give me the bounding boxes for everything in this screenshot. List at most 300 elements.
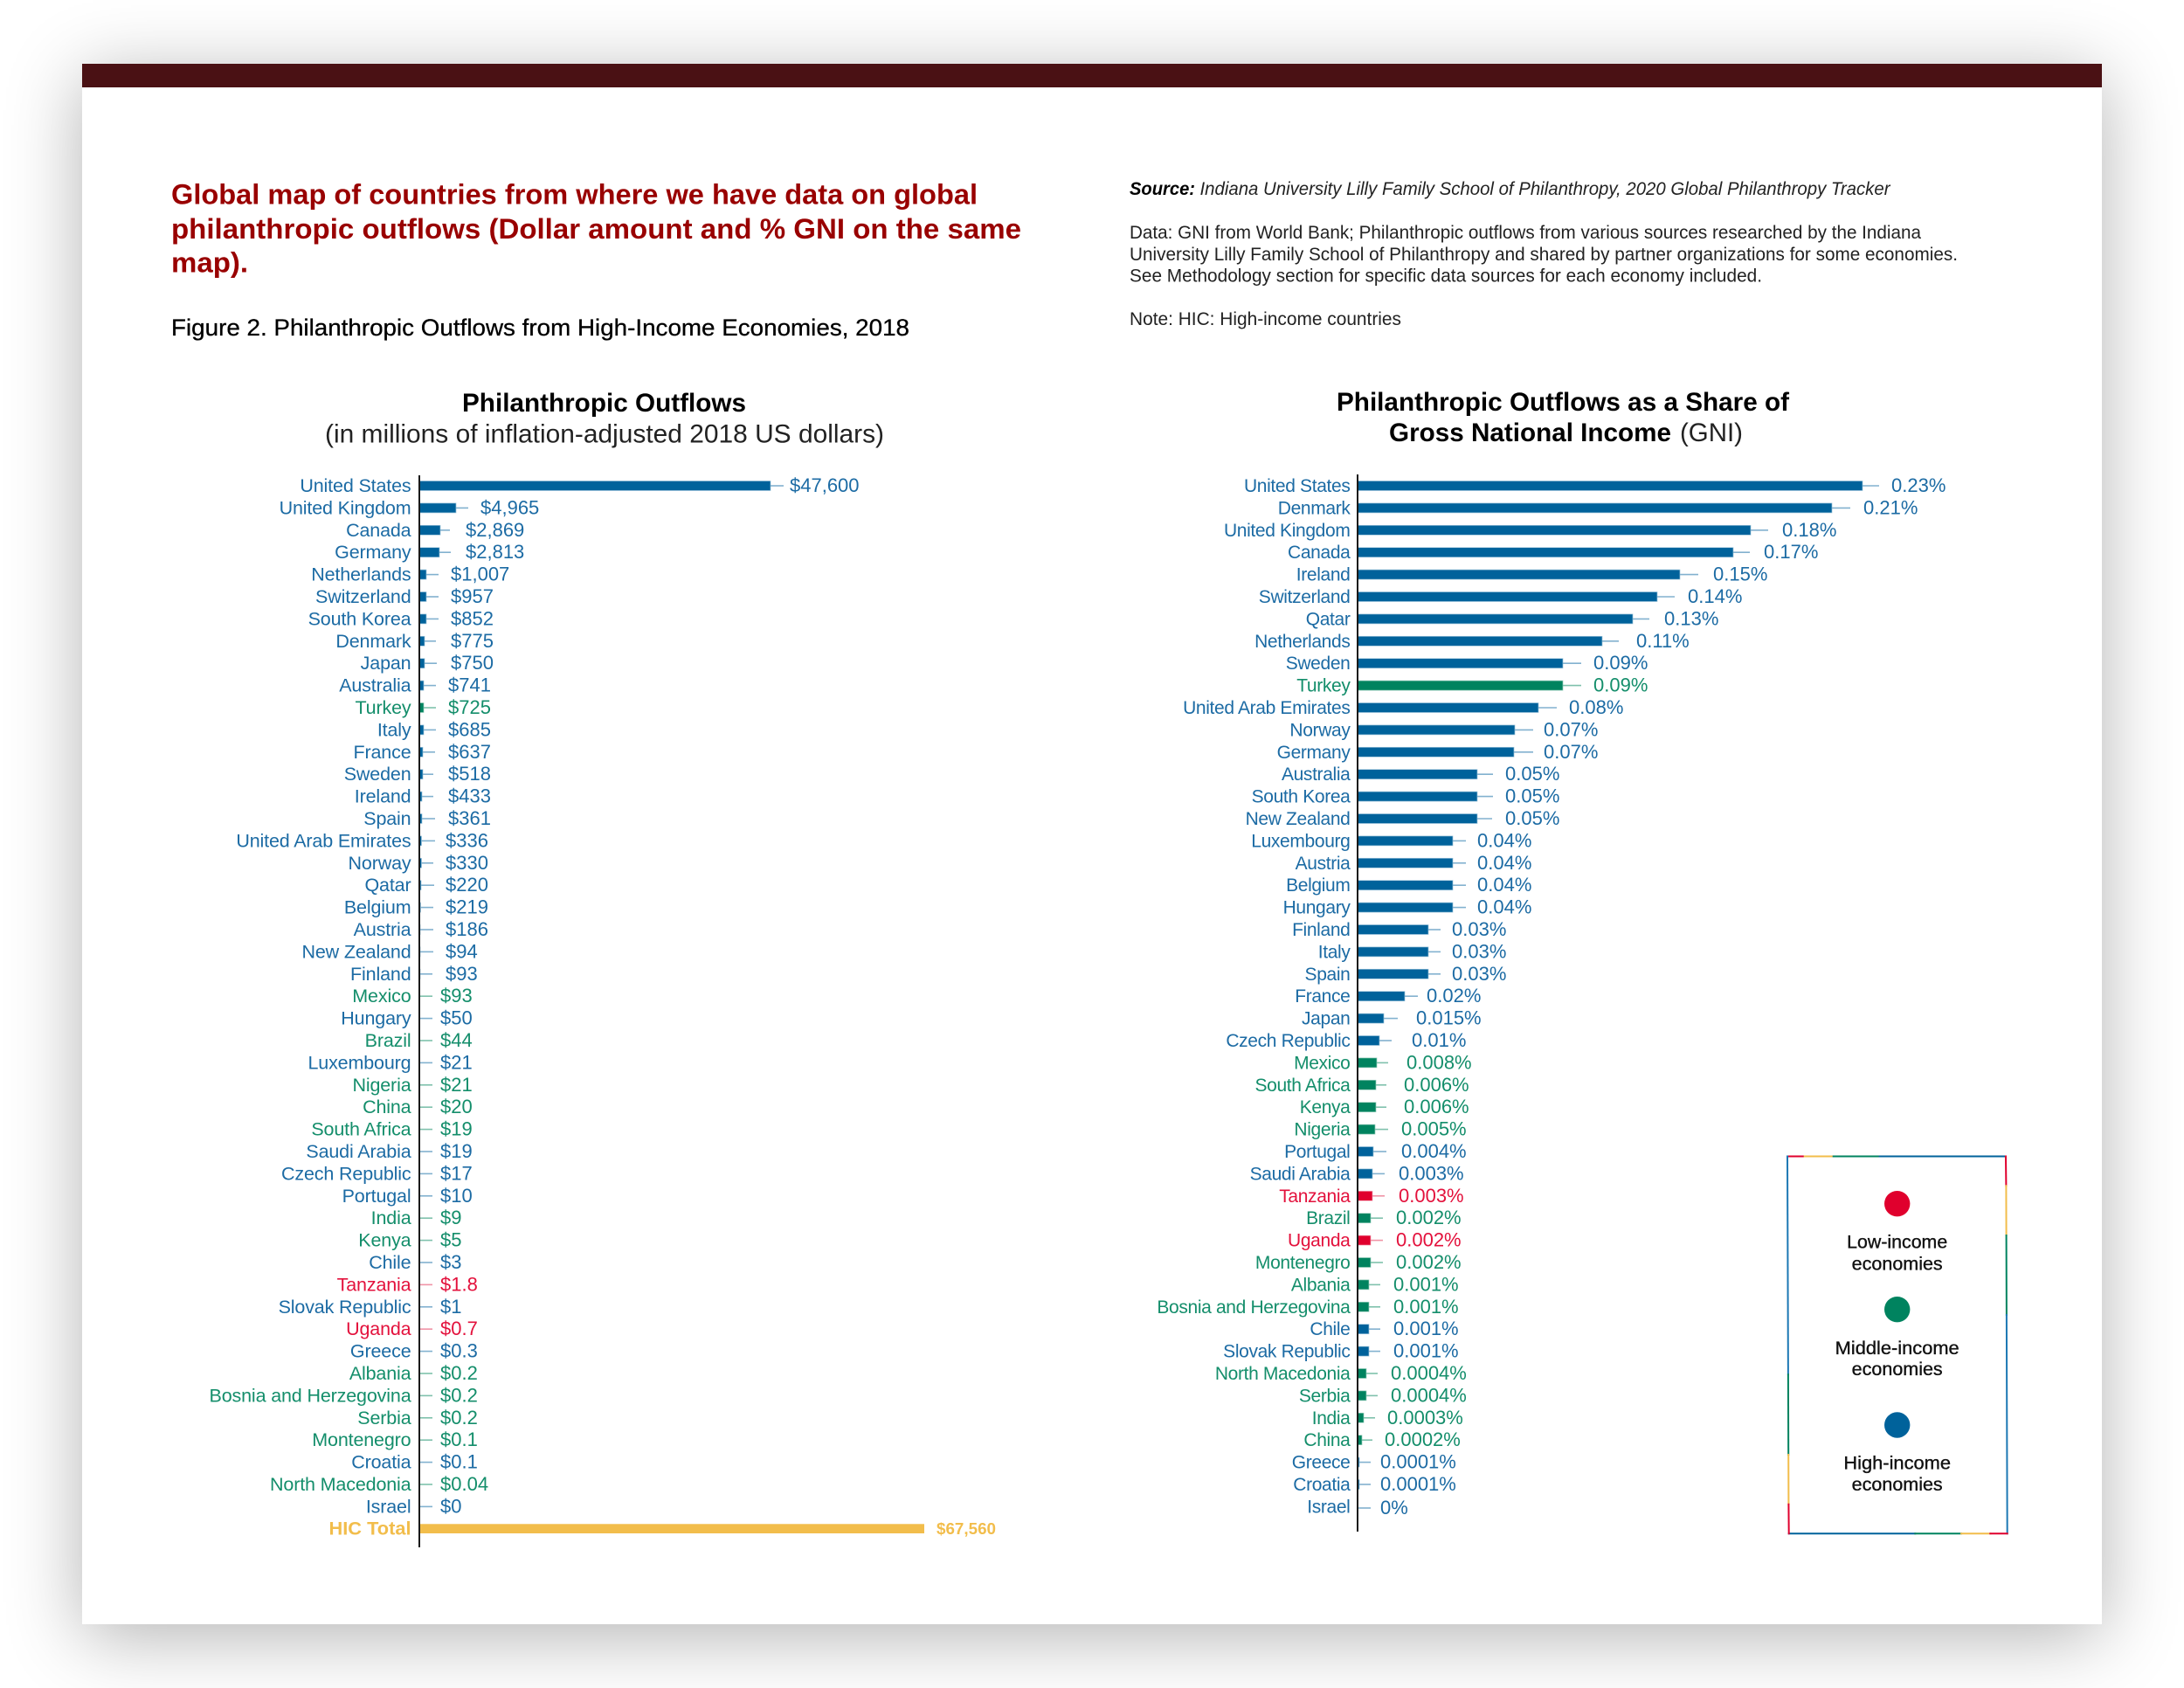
row: Finland: Finland: [350, 964, 411, 985]
row: North Macedonia: $0.04: [440, 1473, 488, 1495]
row: United Arab Emirates: [236, 829, 488, 851]
row: Albania: Albania: [349, 1363, 411, 1384]
row: South Korea: [1252, 785, 1559, 807]
row: Qatar: $220: [446, 874, 488, 896]
row: Norway: 0.07%: [1544, 718, 1598, 740]
row: Chile: [1310, 1318, 1459, 1339]
row: Tanzania: $1.8: [440, 1273, 478, 1295]
row: Greece: [1292, 1451, 1456, 1473]
row: Kenya: Kenya: [358, 1230, 411, 1251]
row: United Kingdom: United Kingdom: [1224, 521, 1351, 541]
row: Saudi Arabia: 0.003%: [1399, 1162, 1464, 1184]
row: Israel: 0%: [1380, 1497, 1408, 1519]
row: Israel: [1307, 1497, 1408, 1519]
row: Australia: 0.05%: [1505, 763, 1559, 785]
row: Albania: [1291, 1273, 1459, 1295]
left chart heading: (in millions of inflation-adjusted 2018 US dollars): [325, 419, 884, 449]
row: Czech Republic: Czech Republic: [1226, 1031, 1351, 1051]
source and notes text block: University Lilly Family School of Philanthropy and shared by partner organizations for some economies.: [1130, 245, 1958, 265]
row: Serbia: 0.0004%: [1391, 1384, 1467, 1406]
row: Australia: [1282, 763, 1559, 785]
row: Spain: Spain: [363, 808, 411, 829]
row: North Macedonia: [1215, 1362, 1467, 1384]
row: India: India: [371, 1207, 411, 1228]
row: Uganda: 0.002%: [1396, 1229, 1462, 1251]
row: Brazil: Brazil: [365, 1030, 411, 1051]
row: Luxembourg: [1251, 829, 1531, 851]
row: Italy: [1318, 940, 1506, 962]
row: Brazil: 0.002%: [1396, 1207, 1462, 1228]
row: Greece: Greece: [1292, 1453, 1351, 1473]
row: United States: [1244, 474, 1946, 496]
row: Japan: [361, 652, 494, 674]
row: Luxembourg: $21: [440, 1051, 473, 1073]
row: Austria: [354, 918, 488, 940]
source and notes text block: Note: HIC: High-income countries: [1130, 309, 1401, 329]
row: Japan: [1302, 1007, 1482, 1029]
row: Serbia: [1299, 1384, 1467, 1406]
row: Luxembourg: [308, 1051, 473, 1073]
row: Chile: 0.001%: [1393, 1318, 1459, 1339]
row: Nigeria: [352, 1074, 473, 1096]
row: Japan: 0.015%: [1416, 1007, 1482, 1029]
left chart heading: [325, 389, 884, 449]
row: Italy: 0.03%: [1452, 940, 1506, 962]
row: HIC total: HIC Total: [328, 1519, 411, 1539]
row: Czech Republic: [1226, 1029, 1466, 1051]
row: United Kingdom: $4,965: [480, 496, 539, 518]
row: Portugal: 0.004%: [1401, 1140, 1467, 1162]
row: Mexico: $93: [440, 985, 473, 1007]
row: Italy: Italy: [1318, 942, 1351, 962]
row: Germany: $2,813: [466, 541, 524, 563]
row: Qatar: 0.13%: [1664, 607, 1718, 629]
row: Netherlands: 0.11%: [1636, 630, 1690, 652]
row: Mexico: [1294, 1051, 1472, 1073]
legend: high-income: [1843, 1412, 1951, 1495]
legend multicolour frame: [1787, 1157, 2008, 1533]
row: Saudi Arabia: $19: [440, 1140, 473, 1162]
row: Turkey: Turkey: [355, 697, 411, 718]
row: Mexico: [352, 985, 473, 1007]
row: Czech Republic: [281, 1162, 473, 1184]
row: Israel: [366, 1495, 461, 1517]
row: Hungary: [341, 1007, 473, 1029]
right chart axis: [1357, 474, 1358, 1532]
row: Chile: [369, 1251, 461, 1273]
row: Croatia: Croatia: [1293, 1475, 1351, 1495]
row: Belgium: [344, 896, 488, 918]
row: France: $637: [448, 741, 491, 763]
row: Albania: Albania: [1291, 1275, 1351, 1295]
row: Qatar: Qatar: [1306, 609, 1351, 629]
row: Hungary: [1283, 896, 1531, 918]
row: New Zealand: New Zealand: [301, 941, 411, 962]
row: Slovak Republic: [1223, 1340, 1459, 1362]
source and notes text block: Source:: [1130, 179, 1195, 199]
row: Qatar: [364, 874, 488, 896]
row: China: China: [1303, 1430, 1351, 1450]
row: United Arab Emirates: United Arab Emirates: [236, 830, 411, 851]
row: Slovak Republic: 0.001%: [1393, 1340, 1459, 1362]
row: Germany: [335, 541, 524, 563]
row: Ireland: Ireland: [1296, 565, 1351, 585]
row: Saudi Arabia: Saudi Arabia: [306, 1141, 411, 1162]
row: South Africa: [1254, 1074, 1469, 1096]
row: Czech Republic: Czech Republic: [281, 1163, 411, 1184]
row: Greece: [350, 1340, 478, 1362]
row: Turkey: [355, 696, 491, 718]
row: Luxembourg: Luxembourg: [1251, 831, 1351, 851]
row: Austria: Austria: [1296, 854, 1351, 874]
row: Sweden: [344, 763, 491, 785]
row: Hungary: 0.04%: [1477, 896, 1531, 918]
row: Chile: Chile: [1310, 1319, 1351, 1339]
row: Spain: [1305, 963, 1506, 985]
row: Austria: [1296, 852, 1531, 874]
row: Norway: [349, 852, 488, 874]
row: Qatar: Qatar: [364, 875, 411, 896]
row: Bosnia and Herzegovina: 0.001%: [1393, 1296, 1459, 1318]
row: Sweden: Sweden: [1286, 654, 1351, 674]
row: Bosnia and Herzegovina: [1157, 1296, 1459, 1318]
row: Canada: [1288, 541, 1818, 563]
row: China: 0.0002%: [1385, 1429, 1461, 1450]
row: Ireland: $433: [448, 785, 491, 807]
row: United Kingdom: [1224, 519, 1836, 541]
row: Sweden: Sweden: [344, 764, 411, 785]
row: Denmark: Denmark: [1278, 498, 1351, 518]
row: Nigeria: $21: [440, 1074, 473, 1096]
row: South Africa: $19: [440, 1118, 473, 1140]
row: Canada: $2,869: [466, 519, 524, 541]
legend: middle-income: economies: [1852, 1359, 1943, 1380]
title: Global map of countries from where we have data on global: [171, 178, 978, 210]
row: Montenegro: [312, 1429, 478, 1450]
row: Qatar: [1306, 607, 1718, 629]
row: Ireland: Ireland: [355, 786, 411, 807]
row: United States: $47,600: [790, 474, 860, 496]
row: Kenya: [1300, 1096, 1469, 1117]
row: Norway: Norway: [349, 853, 411, 874]
row: India: 0.0003%: [1387, 1407, 1463, 1429]
row: France: France: [1295, 986, 1351, 1007]
row: Albania: 0.001%: [1393, 1273, 1459, 1295]
row: India: India: [1312, 1408, 1351, 1429]
row: Sweden: 0.09%: [1593, 652, 1648, 674]
row: United Arab Emirates: [1183, 696, 1623, 718]
row: Japan: Japan: [361, 653, 411, 674]
row: South Africa: [311, 1118, 473, 1140]
right chart heading: [1337, 388, 1790, 447]
legend: high-income: High-income: [1843, 1454, 1951, 1474]
row: Saudi Arabia: [1250, 1162, 1464, 1184]
row: United Kingdom: 0.18%: [1782, 519, 1836, 541]
row: Slovak Republic: [279, 1296, 461, 1318]
row: United States: United States: [1244, 476, 1351, 496]
row: Portugal: $10: [440, 1185, 473, 1207]
row: Finland: [1292, 918, 1506, 940]
row: South Korea: South Korea: [308, 608, 411, 629]
row: Tanzania: [337, 1273, 478, 1295]
row: United States: 0.23%: [1891, 474, 1946, 496]
row: Montenegro: Montenegro: [312, 1429, 411, 1450]
row: Canada: Canada: [1288, 543, 1351, 563]
row: Portugal: [1284, 1140, 1467, 1162]
row: Mexico: 0.008%: [1406, 1051, 1472, 1073]
row: Netherlands: Netherlands: [1254, 632, 1351, 652]
row: Luxembourg: 0.04%: [1477, 829, 1531, 851]
row: New Zealand: 0.05%: [1505, 807, 1559, 829]
row: India: [1312, 1407, 1463, 1429]
legend: low-income: [1847, 1191, 1947, 1274]
row: Uganda: [1288, 1229, 1462, 1251]
row: Norway: Norway: [1289, 720, 1351, 740]
title: philanthropic outflows (Dollar amount and % GNI on the same: [171, 213, 1021, 245]
legend: middle-income: Middle-income: [1835, 1339, 1959, 1359]
row: Uganda: Uganda: [346, 1318, 411, 1339]
row: Montenegro: [1255, 1251, 1462, 1273]
source and notes text block: [1130, 179, 1958, 329]
row: Albania: $0.2: [440, 1362, 478, 1384]
row: HIC total: $67,560: [936, 1519, 996, 1538]
row: Australia: Australia: [339, 675, 411, 696]
row: Germany: Germany: [1277, 743, 1351, 763]
figure caption: Figure 2. Philanthropic Outflows from High-Income Economies, 2018: [171, 315, 909, 341]
row: New Zealand: [1246, 807, 1559, 829]
row: HIC total: [328, 1519, 996, 1539]
row: Nigeria: Nigeria: [1294, 1120, 1351, 1140]
row: North Macedonia: North Macedonia: [1215, 1364, 1351, 1384]
row: South Korea: South Korea: [1252, 787, 1351, 807]
row: Bosnia and Herzegovina: Bosnia and Herzegovina: [1157, 1297, 1351, 1318]
row: Turkey: Turkey: [1296, 676, 1351, 696]
row: Switzerland: [315, 585, 494, 607]
row: Slovak Republic: Slovak Republic: [1223, 1342, 1351, 1362]
legend: high-income: economies: [1852, 1475, 1943, 1495]
row: Spain: 0.03%: [1452, 963, 1506, 985]
row: Finland: $93: [446, 963, 478, 985]
row: Japan: $750: [451, 652, 494, 674]
row: Italy: Italy: [377, 719, 411, 740]
row: Mexico: Mexico: [1294, 1053, 1351, 1073]
row: Hungary: $50: [440, 1007, 473, 1029]
row: United Kingdom: [280, 496, 539, 518]
row: Denmark: [335, 630, 494, 652]
row: Israel: $0: [440, 1495, 461, 1517]
row: Bosnia and Herzegovina: $0.2: [440, 1384, 478, 1406]
row: Ireland: [355, 785, 491, 807]
top dark red banner: [82, 64, 2102, 87]
source and notes text block: See Methodology section for specific data sources for each economy included.: [1130, 266, 1762, 287]
row: Turkey: $725: [448, 696, 491, 718]
row: South Africa: South Africa: [1254, 1076, 1351, 1096]
row: Switzerland: 0.14%: [1688, 585, 1742, 607]
row: Ireland: 0.15%: [1713, 564, 1767, 585]
row: United States: United States: [300, 475, 411, 496]
row: Germany: [1277, 741, 1598, 763]
row: Czech Republic: 0.01%: [1412, 1029, 1466, 1051]
row: Uganda: [346, 1318, 478, 1339]
row: Australia: Australia: [1282, 764, 1351, 785]
row: New Zealand: New Zealand: [1246, 809, 1351, 829]
row: Nigeria: Nigeria: [352, 1075, 411, 1096]
title: [171, 178, 1021, 278]
row: Hungary: Hungary: [341, 1008, 411, 1029]
row: New Zealand: [301, 940, 478, 962]
right chart heading: Gross National Income: [1389, 419, 1671, 447]
row: Chile: Chile: [369, 1252, 411, 1273]
legend: low-income: Low-income: [1847, 1232, 1947, 1252]
row: France: 0.02%: [1427, 985, 1481, 1007]
row: Italy: $685: [448, 718, 491, 740]
row: Croatia: Croatia: [351, 1452, 411, 1473]
row: Switzerland: Switzerland: [1259, 587, 1351, 607]
row: Denmark: Denmark: [335, 631, 411, 652]
row: Germany: Germany: [335, 542, 411, 563]
row: North Macedonia: North Macedonia: [270, 1474, 411, 1495]
row: United Arab Emirates: 0.08%: [1569, 696, 1623, 718]
row: United Arab Emirates: United Arab Emirates: [1183, 698, 1351, 718]
row: Turkey: [1296, 675, 1648, 696]
row: Germany: 0.07%: [1544, 741, 1598, 763]
row: Kenya: $5: [440, 1229, 461, 1251]
row: China: [363, 1096, 473, 1117]
row: Norway: $330: [446, 852, 488, 874]
row: Kenya: 0.006%: [1404, 1096, 1469, 1117]
row: Belgium: Belgium: [1286, 875, 1351, 896]
row: Portugal: Portugal: [342, 1186, 411, 1207]
row: Austria: 0.04%: [1477, 852, 1531, 874]
row: Israel: Israel: [1307, 1497, 1351, 1517]
row: Sweden: $518: [448, 763, 491, 785]
row: Denmark: $775: [451, 630, 494, 652]
row: Serbia: Serbia: [357, 1408, 411, 1429]
legend panel: [1787, 1157, 2008, 1533]
row: Spain: $361: [448, 807, 491, 829]
row: Sweden: [1286, 652, 1648, 674]
source and notes text block: Indiana University Lilly Family School of Philanthropy, 2020 Global Philanthropy Tracker: [1200, 179, 1890, 199]
row: Denmark: 0.21%: [1863, 496, 1918, 518]
row: Tanzania: [1279, 1185, 1464, 1207]
row: Czech Republic: $17: [440, 1162, 473, 1184]
title: map).: [171, 246, 248, 278]
row: United States: [300, 474, 860, 496]
row: Belgium: 0.04%: [1477, 874, 1531, 896]
row: North Macedonia: [270, 1473, 488, 1495]
row: New Zealand: $94: [446, 940, 478, 962]
row: Kenya: Kenya: [1300, 1097, 1351, 1117]
row: South Korea: 0.05%: [1505, 785, 1559, 807]
row: Finland: 0.03%: [1452, 918, 1506, 940]
row: Croatia: [351, 1451, 478, 1473]
source and notes text block: Data: GNI from World Bank; Philanthropic outflows from various sources researched by the Indiana: [1130, 223, 1921, 243]
left chart heading: Philanthropic Outflows: [462, 389, 746, 418]
row: Austria: Austria: [354, 919, 411, 940]
row: China: [1303, 1429, 1461, 1450]
row: Brazil: Brazil: [1306, 1208, 1351, 1228]
row: Australia: $741: [448, 675, 491, 696]
row: Brazil: $44: [440, 1029, 473, 1051]
row: Finland: Finland: [1292, 920, 1351, 940]
left chart axis: [418, 475, 420, 1547]
row: France: [1295, 985, 1481, 1007]
right chart heading: (GNI): [1680, 419, 1743, 447]
row: South Korea: [308, 607, 494, 629]
row: Italy: [377, 718, 491, 740]
row: South Korea: $852: [451, 607, 494, 629]
bar chart: philanthropic outflows in dollars: [210, 474, 996, 1547]
row: Tanzania: 0.003%: [1399, 1185, 1464, 1207]
row: Brazil: [365, 1029, 473, 1051]
row: Netherlands: [1254, 630, 1690, 652]
row: Bosnia and Herzegovina: Bosnia and Herzegovina: [210, 1385, 411, 1406]
legend: middle-income: [1835, 1297, 1959, 1380]
row: Switzerland: [1259, 585, 1742, 607]
row: Tanzania: Tanzania: [337, 1274, 411, 1295]
row: Greece: Greece: [350, 1341, 411, 1362]
row: Serbia: $0.2: [440, 1407, 478, 1429]
row: China: $20: [440, 1096, 473, 1117]
row: Croatia: 0.0001%: [1380, 1473, 1456, 1495]
row: Mexico: Mexico: [352, 986, 411, 1007]
legend: low-income: economies: [1852, 1254, 1943, 1274]
row: Serbia: Serbia: [1299, 1386, 1351, 1406]
row: Switzerland: Switzerland: [315, 586, 411, 607]
row: Montenegro: $0.1: [440, 1429, 478, 1450]
row: Netherlands: Netherlands: [311, 564, 411, 585]
row: Netherlands: $1,007: [451, 564, 509, 585]
row: Canada: [346, 519, 524, 541]
row: Denmark: [1278, 496, 1918, 518]
row: Israel: Israel: [366, 1496, 411, 1517]
row: Croatia: [1293, 1473, 1456, 1495]
row: Nigeria: [1294, 1118, 1467, 1140]
row: Belgium: Belgium: [344, 897, 411, 918]
row: South Africa: 0.006%: [1404, 1074, 1469, 1096]
row: Canada: 0.17%: [1764, 541, 1818, 563]
row: Switzerland: $957: [451, 585, 494, 607]
row: Brazil: [1306, 1207, 1462, 1228]
row: India: [371, 1207, 461, 1228]
row: Kenya: [358, 1229, 461, 1251]
row: Australia: [339, 675, 491, 696]
row: United Arab Emirates: $336: [446, 829, 488, 851]
row: Nigeria: 0.005%: [1401, 1118, 1467, 1140]
row: Ireland: [1296, 564, 1767, 585]
row: Greece: $0.3: [440, 1340, 478, 1362]
row: Turkey: 0.09%: [1593, 675, 1648, 696]
row: Portugal: [342, 1185, 473, 1207]
row: Netherlands: [311, 564, 509, 585]
row: United Kingdom: United Kingdom: [280, 497, 411, 518]
row: South Africa: South Africa: [311, 1119, 411, 1140]
row: Slovak Republic: $1: [440, 1296, 461, 1318]
right chart heading: Philanthropic Outflows as a Share of: [1337, 388, 1790, 417]
row: Luxembourg: Luxembourg: [308, 1052, 411, 1073]
row: Serbia: [357, 1407, 478, 1429]
row: Uganda: Uganda: [1288, 1231, 1351, 1251]
row: Croatia: $0.1: [440, 1451, 478, 1473]
row: Montenegro: 0.002%: [1396, 1251, 1462, 1273]
row: Canada: Canada: [346, 520, 411, 541]
row: Norway: [1289, 718, 1598, 740]
row: China: China: [363, 1097, 411, 1117]
row: Portugal: Portugal: [1284, 1142, 1351, 1162]
row: Montenegro: Montenegro: [1255, 1253, 1351, 1273]
row: Finland: [350, 963, 478, 985]
row: Hungary: Hungary: [1283, 898, 1351, 918]
